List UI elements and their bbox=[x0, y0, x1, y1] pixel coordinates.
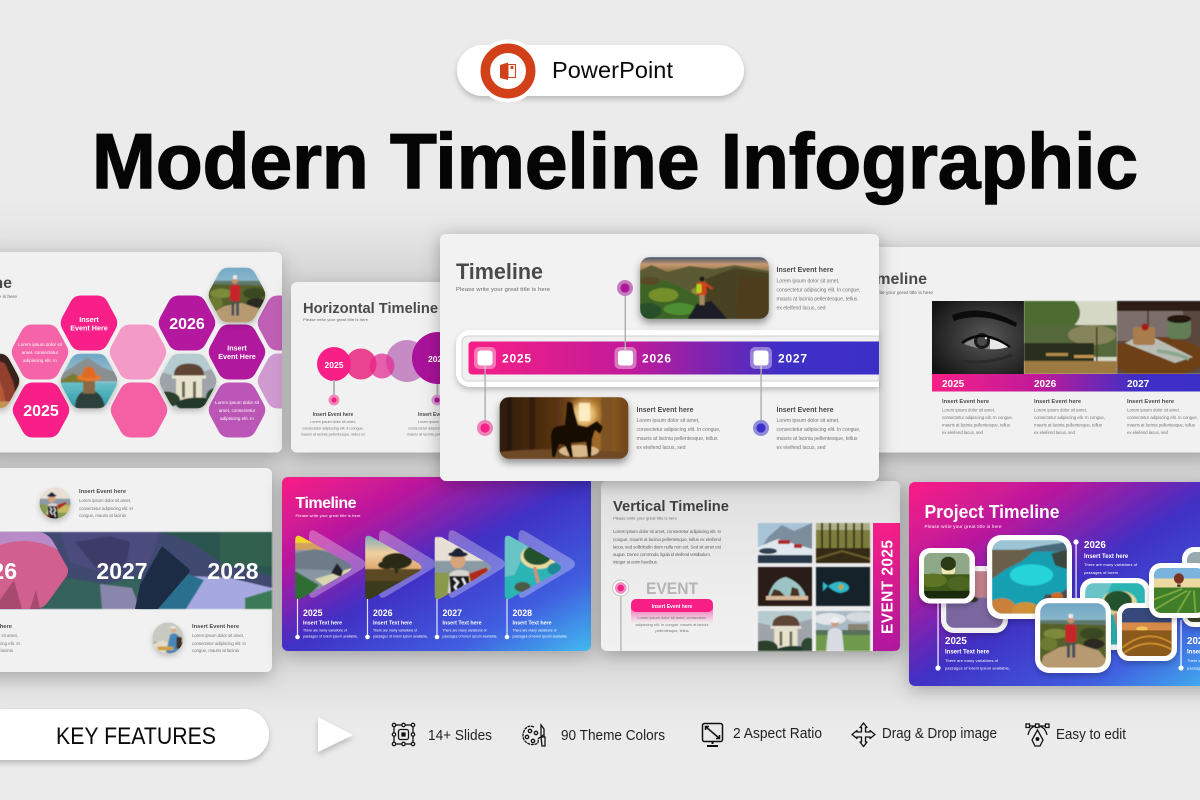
text block bottom right: Lorem ipsum dolor sit amet, bbox=[776, 418, 840, 424]
text block top: Lorem ipsum dolor sit amet, bbox=[776, 278, 840, 284]
photo: park bbox=[1012, 291, 1117, 374]
hexagon: clipped purple bbox=[258, 296, 282, 350]
hexagon: insert event purple: Insert bbox=[227, 344, 247, 352]
photo: forest bbox=[816, 523, 870, 563]
hexagon: 2026 bbox=[159, 296, 215, 350]
text block 2026: Lorem ipsum dolor sit amet, bbox=[1034, 408, 1087, 412]
event pill: adipiscing elit. In congue, mauris at lacinia bbox=[636, 622, 709, 627]
hexagon: insert event purple bbox=[209, 324, 265, 380]
paragraph: lacus, sed sollicitudin diam nulla non est. Sed sit amet est bbox=[613, 544, 722, 550]
year strip bbox=[932, 374, 1200, 392]
text block bottom left bbox=[0, 624, 21, 653]
photo: snowy harbour bbox=[758, 523, 812, 563]
overlapping circles: 2025 bbox=[325, 360, 344, 370]
photo hexagon: woman with hat bbox=[59, 354, 119, 408]
text block 2026: mauris at lacinia pellentesque, tellus bbox=[1034, 422, 1103, 428]
panel: horizontal timeline: Please write your great title is here bbox=[303, 317, 369, 322]
step 2025: There are many variations of bbox=[303, 628, 347, 632]
photo: fish bbox=[816, 567, 870, 606]
icon: palette bbox=[523, 725, 545, 746]
timeline 2026 bbox=[1073, 539, 1138, 602]
hexagon: 2025 bbox=[13, 382, 69, 438]
timeline band bbox=[456, 330, 879, 387]
text block 2025 bbox=[301, 412, 365, 436]
panel: project timeline bbox=[909, 482, 1200, 686]
step 2027: 2027 bbox=[442, 608, 462, 618]
event marker bbox=[613, 580, 629, 651]
timeline 2026: 2026 bbox=[1084, 540, 1106, 551]
text block bottom right: mauris at lacinia pellentesque, tellus bbox=[776, 436, 858, 442]
hexagon: mid pink bbox=[111, 382, 167, 438]
text block bottom right: Insert Event here bbox=[776, 407, 834, 414]
text block bottom middle: consectetur adipiscing elit. In congue, bbox=[636, 427, 720, 433]
feature: easy to edit bbox=[1026, 724, 1126, 746]
step 2026: passages of lorem ipsum available, bbox=[373, 634, 428, 638]
hexagon: insert event purple: Event Here bbox=[218, 352, 256, 361]
paragraph: congue, mauris at lacinia pellentesque, tellus ex eleifend bbox=[613, 537, 721, 542]
text block top bbox=[79, 489, 134, 518]
photo: hiker on mountain bbox=[634, 257, 770, 319]
text block top bbox=[776, 267, 860, 312]
text block 2025: Lorem ipsum dolor sit amet, bbox=[310, 420, 356, 424]
text block 2027: Insert Event here bbox=[1127, 399, 1175, 405]
text block 2026: ex eleifend lacus, sed bbox=[1034, 430, 1076, 435]
photo band: 2027 bbox=[96, 558, 148, 584]
connector and dot 2025 bbox=[328, 380, 340, 406]
panel: vertical timeline bbox=[601, 481, 900, 658]
step 2025: Insert Text here bbox=[303, 621, 342, 627]
text block bottom middle bbox=[636, 407, 720, 451]
text block 2026: consectetur adipiscing elit. In congue, bbox=[1034, 415, 1105, 420]
text block top: congue, mauris at lacinia bbox=[79, 513, 127, 518]
timeline 2026: passages of lorem bbox=[1084, 570, 1119, 575]
photo: cave bbox=[758, 567, 812, 606]
marker 2025: 2025 bbox=[502, 352, 531, 366]
hexagon: 2025: 2025 bbox=[23, 403, 59, 420]
text block bottom right bbox=[776, 407, 860, 451]
timeline 2025: 2025 bbox=[945, 636, 967, 647]
key features pill bbox=[0, 709, 269, 760]
text block top: ex eleifend lacus, sed bbox=[776, 306, 826, 312]
photo tile: sunset tree bbox=[919, 548, 975, 604]
key features pill: KEY FEATURES bbox=[56, 723, 216, 750]
dot top purple bbox=[617, 280, 633, 296]
text block 2026 bbox=[1034, 399, 1105, 435]
timeline 2025: passages of lorem ipsum available, bbox=[945, 666, 1010, 670]
text block 2025: mauris at lacinia pellentesque, tellus ex bbox=[301, 432, 365, 436]
text block bottom middle: Insert Event here bbox=[636, 407, 694, 414]
event label: EVENT bbox=[646, 580, 698, 598]
paragraph bbox=[613, 529, 722, 564]
text block bottom right: ex eleifend lacus, sed bbox=[776, 445, 826, 451]
photo tile: balloon bbox=[1149, 563, 1200, 618]
icon: slides bbox=[392, 723, 415, 746]
text block bottom right bbox=[192, 624, 247, 653]
photo: photographer bbox=[814, 611, 874, 651]
hexagon: insert event pink: Event Here bbox=[70, 324, 108, 332]
timeline 2026: Insert Text here bbox=[1084, 554, 1129, 560]
photo band: 2028 bbox=[207, 558, 259, 584]
step 2028: 2028 bbox=[512, 608, 532, 618]
panel: chevron band timeline bbox=[0, 468, 272, 672]
panel: hexagon timeline bbox=[0, 252, 314, 452]
text block 2026: mauris at lacinia pellentesque, tellus ex bbox=[407, 432, 471, 436]
timeline 2025 bbox=[935, 600, 1010, 671]
marker 2027 bbox=[750, 347, 807, 369]
photo tile: grey back bbox=[1182, 547, 1200, 627]
feature: 2 aspect ratio: 2 Aspect Ratio bbox=[733, 726, 822, 742]
text block 2025: Insert Event here bbox=[942, 399, 990, 405]
slide title: Timeline bbox=[296, 495, 357, 512]
text block 2026: Lorem ipsum dolor sit amet, bbox=[418, 420, 464, 424]
text block bottom right: consectetur adipiscing elit. In congue, bbox=[776, 427, 860, 433]
photo: horse rider bbox=[499, 394, 629, 459]
marker 2026 bbox=[614, 347, 671, 369]
panel: vertical timeline: Please write your great title is here bbox=[613, 516, 678, 520]
marker 2025 bbox=[474, 347, 531, 369]
event pill: Insert Event here bbox=[652, 604, 693, 610]
slide title: Horizontal Timeline bbox=[303, 301, 438, 317]
text block 2026: Insert Event here bbox=[418, 412, 459, 418]
hexagon: lorem purple bbox=[209, 382, 265, 438]
text block bottom middle: mauris at lacinia pellentesque, tellus bbox=[636, 436, 718, 442]
text block bottom right: Lorem ipsum dolor sit amet, bbox=[192, 633, 244, 638]
feature: drag and drop bbox=[852, 723, 997, 746]
text block 2025: ex eleifend lacus, sed bbox=[942, 430, 984, 435]
photo hexagon: observatory bbox=[152, 354, 222, 412]
feature: 14+ slides: 14+ Slides bbox=[428, 728, 492, 744]
slide title: Timeline bbox=[456, 259, 543, 284]
photo tile: hiker bbox=[1035, 598, 1111, 673]
text block bottom right: Insert Event here bbox=[192, 624, 240, 630]
photo: eye bbox=[932, 301, 1024, 374]
year strip: 2027 bbox=[1127, 379, 1150, 390]
hexagon: lorem pink: Lorem ipsum dolor sit bbox=[18, 342, 63, 347]
text block 2025: Lorem ipsum dolor sit amet, bbox=[942, 408, 995, 412]
step 2025 bbox=[295, 530, 366, 639]
year strip: 2026 bbox=[1034, 379, 1057, 390]
hexagon: lorem purple: amet, consectetur bbox=[219, 408, 256, 413]
feature: 90 theme colors: 90 Theme Colors bbox=[561, 728, 665, 744]
photo hexagon: canyon bbox=[0, 354, 21, 408]
hexagon: 2026: 2026 bbox=[169, 316, 205, 333]
hexagon: insert event pink: Insert bbox=[79, 315, 99, 324]
photo tile: island back bbox=[1080, 578, 1150, 650]
year strip: 2025 bbox=[942, 379, 965, 390]
step 2025: passages of lorem ipsum available, bbox=[303, 634, 358, 638]
dot bottom pink bbox=[477, 420, 493, 436]
step 2028 bbox=[504, 530, 575, 639]
timeline 2026: There are many variations of bbox=[1084, 562, 1138, 567]
icon: pen tool bbox=[1026, 724, 1049, 746]
icon: move arrows bbox=[852, 723, 875, 746]
overlapping circles bbox=[317, 332, 464, 384]
panel: horizontal timeline bbox=[291, 282, 471, 452]
event pill: Lorem ipsum dolor sit amet, consectetur bbox=[637, 615, 707, 620]
text block bottom middle: Lorem ipsum dolor sit amet, bbox=[636, 418, 700, 424]
marker 2027: 2027 bbox=[778, 352, 807, 366]
text block top: Insert Event here bbox=[79, 489, 127, 495]
feature: 2 aspect ratio bbox=[702, 724, 822, 746]
slide title: Project Timeline bbox=[924, 502, 1060, 522]
step 2028: passages of lorem ipsum available, bbox=[512, 634, 568, 638]
icon: powerpoint bbox=[500, 62, 516, 80]
text block 2027: ex eleifend lacus, sed bbox=[1127, 430, 1169, 435]
side label: EVENT 2025 bbox=[880, 540, 896, 634]
timeline 2025: There are many variations of bbox=[945, 658, 999, 663]
text block 2026: Insert Event here bbox=[1034, 399, 1082, 405]
slide title: Vertical Timeline bbox=[613, 498, 729, 515]
step 2026: There are many variations of bbox=[373, 628, 417, 632]
step 2027: There are many variations of bbox=[442, 628, 487, 632]
text block 2026 bbox=[407, 412, 471, 436]
panel: photo strip timeline: Please write your great title is here bbox=[858, 290, 933, 296]
step 2028: There are many variations of bbox=[512, 628, 557, 632]
text block bottom right: consectetur adipiscing elit. In bbox=[192, 641, 247, 646]
text block top: consectetur adipiscing elit. In congue, bbox=[776, 288, 860, 294]
timeline 2027 bbox=[1178, 620, 1200, 671]
dot bottom blue bbox=[753, 420, 769, 436]
photo band bbox=[0, 532, 272, 609]
connector lines bbox=[484, 288, 762, 428]
text block 2025 bbox=[942, 399, 1013, 435]
text block top: Insert Event here bbox=[776, 267, 834, 274]
text block 2025: Insert Event here bbox=[313, 412, 354, 418]
side label bbox=[873, 523, 900, 651]
text block bottom middle: ex eleifend lacus, sed bbox=[636, 445, 686, 451]
step 2027: Insert Text here bbox=[442, 621, 482, 627]
marker 2026: 2026 bbox=[642, 352, 671, 366]
text block 2027: mauris at lacinia pellentesque, tellus bbox=[1127, 422, 1196, 428]
step 2028: Insert Text here bbox=[512, 621, 552, 627]
arrow: key features bbox=[318, 717, 353, 752]
photo: observatory bbox=[753, 606, 816, 658]
hexagon: lorem purple: adipiscing elit. In bbox=[220, 416, 254, 421]
feature: drag and drop: Drag & Drop image bbox=[882, 726, 997, 742]
text block top: consectetur adipiscing elit. In bbox=[79, 506, 134, 511]
slide title: Timeline bbox=[862, 271, 927, 288]
feature: easy to edit: Easy to edit bbox=[1056, 727, 1126, 743]
powerpoint badge bbox=[457, 40, 744, 102]
panel: main timeline: Please write your great title is here bbox=[456, 287, 550, 293]
step 2027: passages of lorem ipsum available, bbox=[442, 634, 498, 638]
circle photo: seated man bbox=[152, 622, 184, 654]
step 2025: 2025 bbox=[303, 608, 323, 618]
text block top: Lorem ipsum dolor sit amet, bbox=[79, 498, 131, 503]
timeline 2025: Insert Text here bbox=[945, 650, 990, 656]
hexagon: lorem pink bbox=[12, 324, 68, 380]
paragraph: augue. Donec commodo, ligula id eleifend vestibulum, bbox=[613, 552, 711, 557]
photo hexagon: hiker bbox=[207, 265, 267, 325]
text block 2027: Lorem ipsum dolor sit amet, bbox=[1127, 408, 1180, 412]
paragraph: Lorem ipsum dolor sit amet, consectetur adipiscing elit. In bbox=[613, 529, 721, 534]
panel: photo strip timeline bbox=[858, 247, 1200, 452]
overlapping circles: 2026 bbox=[428, 354, 447, 364]
circle photo: traveller bbox=[39, 487, 71, 519]
step 2026: 2026 bbox=[373, 608, 393, 618]
event pill: pellentesque, tellus bbox=[655, 628, 689, 633]
text block 2026: consectetur adipiscing elit. In congue, bbox=[408, 426, 470, 430]
hexagon: clipped lilac bbox=[258, 354, 282, 408]
hexagon: lorem pink: adipiscing elit. In bbox=[23, 358, 57, 363]
text block 2025: mauris at lacinia pellentesque, tellus bbox=[942, 422, 1011, 428]
powerpoint badge: PowerPoint bbox=[552, 57, 673, 83]
photo tile: terrace bbox=[1117, 603, 1177, 661]
panel: triangle timeline: Please write your great title is here bbox=[296, 513, 361, 518]
text block 2027 bbox=[1127, 399, 1198, 435]
step 2027 bbox=[432, 530, 505, 639]
hexagon: insert event pink bbox=[61, 296, 117, 350]
panel: main timeline bbox=[440, 234, 879, 481]
icon: monitor bbox=[702, 724, 722, 746]
text block bottom right: congue, mauris at lacinia bbox=[192, 648, 240, 653]
hexagon: light pink bbox=[110, 324, 166, 380]
photo tile: lavender back bbox=[941, 566, 1008, 633]
connector and dot 2026 bbox=[432, 384, 442, 406]
event pill bbox=[631, 599, 713, 633]
photo: cake bbox=[1109, 301, 1200, 377]
step 2026: Insert Text here bbox=[373, 621, 412, 627]
text block 2027: consectetur adipiscing elit. In congue, bbox=[1127, 415, 1198, 420]
hexagon: lorem pink: amet, consectetur bbox=[22, 350, 59, 355]
text block 2025: consectetur adipiscing elit. In congue, bbox=[942, 415, 1013, 420]
panel: triangle timeline bbox=[282, 477, 591, 651]
photo tile: coast bbox=[987, 535, 1072, 619]
paragraph: integer at enim faucibus. bbox=[613, 560, 658, 564]
text block 2025: consectetur adipiscing elit. In congue, bbox=[302, 426, 364, 430]
step 2026 bbox=[365, 530, 436, 639]
feature: 14+ slides bbox=[392, 723, 492, 746]
panel: project timeline: Please write your great title is here bbox=[924, 524, 1002, 529]
feature: 90 theme colors bbox=[523, 725, 665, 746]
hexagon: lorem purple: Lorem ipsum dolor sit bbox=[215, 400, 260, 405]
text block top: mauris at lacinia pellentesque, tellus bbox=[776, 296, 858, 302]
title: Modern Timeline Infographic bbox=[92, 117, 1138, 205]
